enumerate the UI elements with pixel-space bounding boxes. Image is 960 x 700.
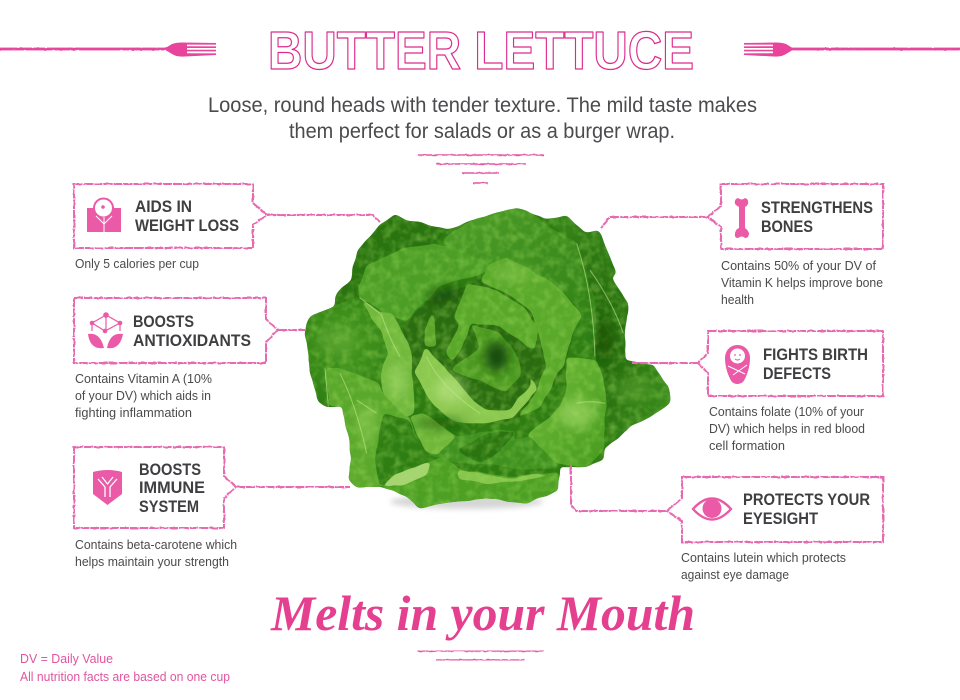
panel: boosts antioxidants xyxy=(74,298,305,420)
heading: BONES xyxy=(761,218,813,236)
callout frame xyxy=(74,184,380,248)
icon: scale xyxy=(87,198,121,232)
top divider xyxy=(418,155,544,183)
right fork xyxy=(744,42,960,57)
body text: Contains 50% of your DV of xyxy=(721,259,877,273)
body text xyxy=(681,551,846,582)
heading: AIDS IN xyxy=(135,198,192,216)
heading: FIGHTS BIRTH xyxy=(763,346,868,364)
lettuce illustration xyxy=(305,208,670,509)
body text: Contains lutein which protects xyxy=(681,551,846,565)
body text: Only 5 calories per cup xyxy=(75,257,199,271)
heading xyxy=(139,461,205,516)
panel: strengthens bones xyxy=(601,184,883,307)
heading xyxy=(133,313,251,350)
panel: boosts immune system xyxy=(74,447,350,569)
footnote xyxy=(20,652,230,684)
body text: helps maintain your strength xyxy=(75,555,229,569)
heading: IMMUNE xyxy=(139,479,205,497)
heading: SYSTEM xyxy=(139,498,199,516)
icon: bone xyxy=(735,198,749,238)
body text: cell formation xyxy=(709,439,785,453)
heading xyxy=(135,198,239,235)
body text xyxy=(75,538,237,569)
panel: aids in weight loss xyxy=(74,184,380,271)
panel: fights birth defects xyxy=(632,331,883,453)
icon: shield xyxy=(93,470,122,505)
icon: eye xyxy=(693,498,731,520)
body text: DV) which helps in red blood xyxy=(709,422,865,436)
panel: protects your eyesight xyxy=(571,466,883,582)
subtitle: Loose, round heads with tender texture. The mild taste makes xyxy=(208,94,757,117)
heading: EYESIGHT xyxy=(743,510,818,528)
heading: BOOSTS xyxy=(139,461,201,479)
body text: Vitamin K helps improve bone xyxy=(721,276,883,290)
script tagline: Melts in your Mouth xyxy=(270,585,695,641)
heading: WEIGHT LOSS xyxy=(135,217,239,235)
callout frame xyxy=(571,466,883,542)
footnote: DV = Daily Value xyxy=(20,652,113,666)
title: BUTTER LETTUCE xyxy=(268,21,694,81)
heading: PROTECTS YOUR xyxy=(743,491,870,509)
subtitle: them perfect for salads or as a burger wrap. xyxy=(289,120,675,143)
body text: Contains folate (10% of your xyxy=(709,405,864,419)
icon: swaddled baby xyxy=(725,345,750,384)
subtitle xyxy=(208,94,757,143)
bottom divider xyxy=(418,651,544,660)
heading: BOOSTS xyxy=(133,313,194,331)
body text: fighting inflammation xyxy=(75,406,192,420)
footnote: All nutrition facts are based on one cup xyxy=(20,670,230,684)
callout frame xyxy=(632,331,883,396)
heading xyxy=(743,491,870,528)
body text xyxy=(709,405,865,453)
callout frame xyxy=(74,447,350,528)
heading: ANTIOXIDANTS xyxy=(133,332,251,350)
heading: STRENGTHENS xyxy=(761,199,873,217)
body text: against eye damage xyxy=(681,568,789,582)
body text: health xyxy=(721,293,754,307)
left fork xyxy=(0,42,216,57)
body text xyxy=(721,259,883,307)
callout frame xyxy=(601,184,883,249)
body text: Contains beta-carotene which xyxy=(75,538,237,552)
heading xyxy=(763,346,868,383)
heading xyxy=(761,199,873,236)
body text xyxy=(75,372,212,420)
heading: DEFECTS xyxy=(763,365,831,383)
icon: molecule and leaves xyxy=(88,312,123,348)
body text: of your DV) which aids in xyxy=(75,389,211,403)
callout frame xyxy=(74,298,305,363)
body text: Contains Vitamin A (10% xyxy=(75,372,212,386)
